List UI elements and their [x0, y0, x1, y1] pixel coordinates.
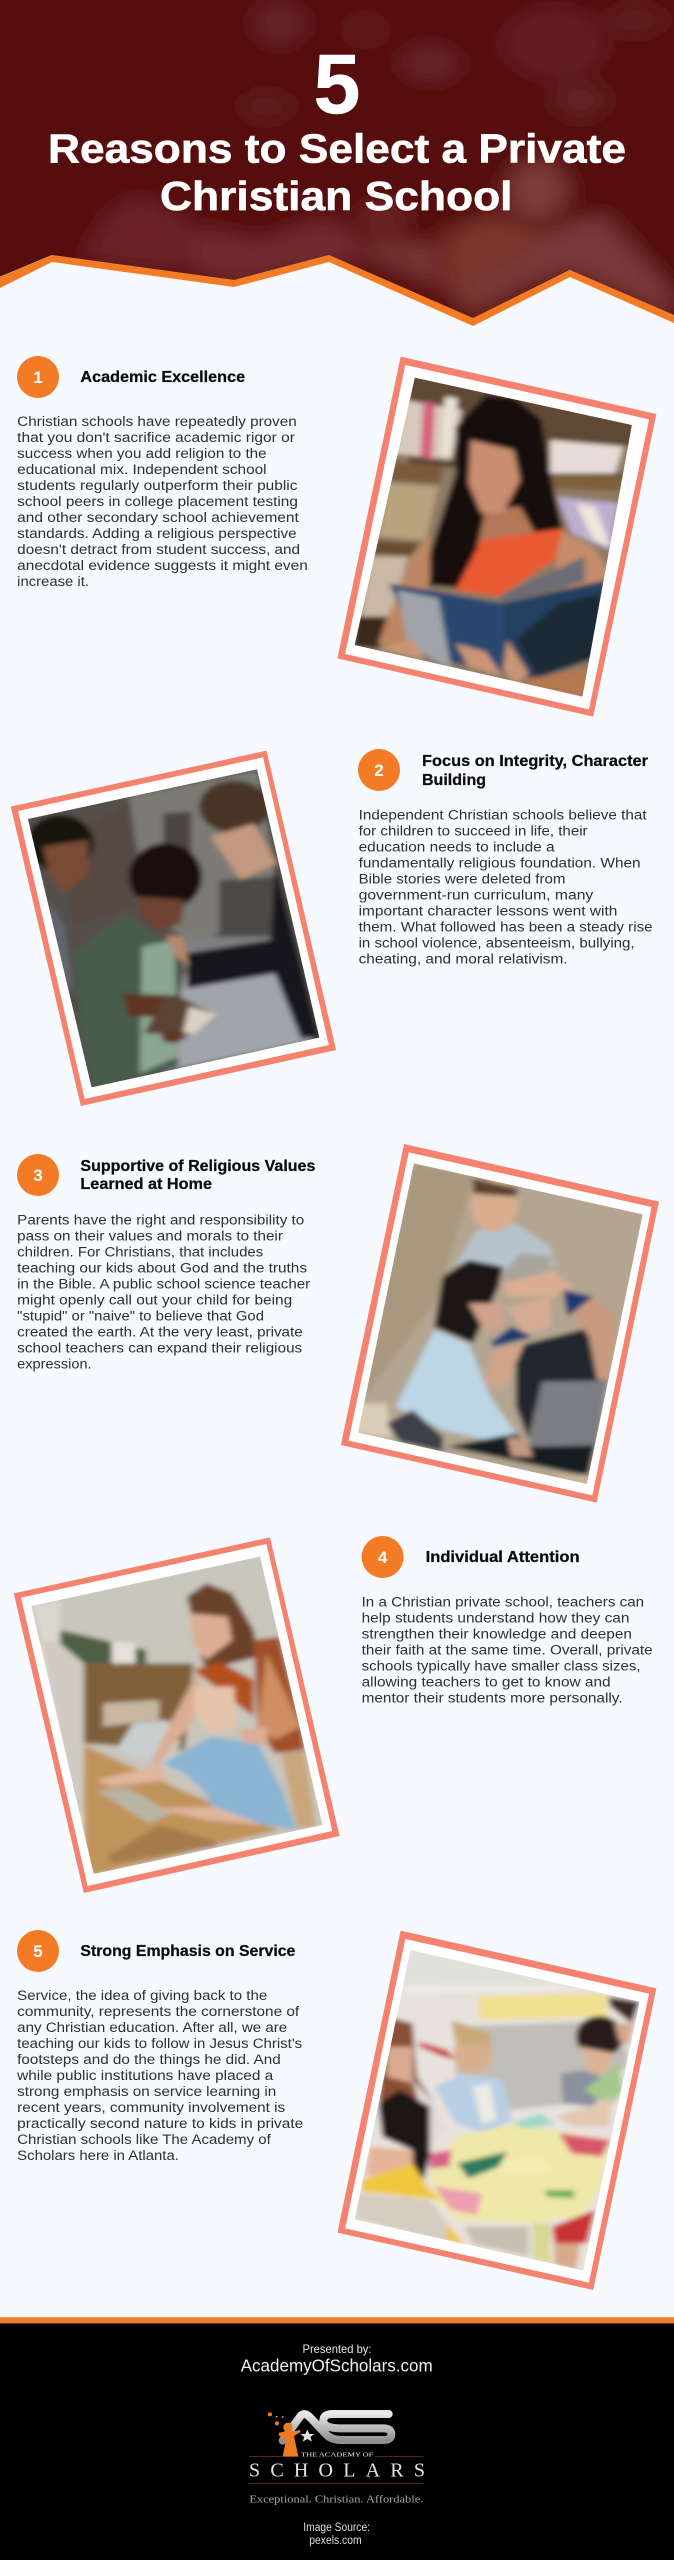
- photo 3: family hugging around a laptop: [340, 1144, 666, 1503]
- heading 5: Strong Emphasis on Service: [80, 1943, 296, 1960]
- number badge 2: 2: [374, 761, 384, 780]
- image source credit: pexels.com: [309, 2535, 362, 2547]
- heading 2: [422, 753, 648, 789]
- body text 2: [359, 807, 653, 966]
- body text 3: [17, 1212, 311, 1371]
- image source credit: Image Source:: [303, 2522, 370, 2534]
- number badge 1: 1: [33, 368, 43, 387]
- reason 5: [16, 1930, 662, 2290]
- body text 1: that you don't sacrifice academic rigor or: [17, 430, 295, 445]
- logo rules: [249, 2456, 423, 2483]
- body text 3: in the Bible. A public school science teacher: [17, 1276, 311, 1291]
- presented by text: AcademyOfScholars.com: [241, 2356, 433, 2376]
- body text 1: doesn't detract from student success, and: [17, 542, 300, 557]
- photo 5: children doing crafts at a table: [335, 1931, 662, 2290]
- body text 4: their faith at the same time. Overall, private: [362, 1643, 653, 1658]
- logo wordmark: Exceptional. Christian. Affordable.: [249, 2495, 423, 2506]
- body text 5: any Christian education. After all, we are: [17, 2020, 287, 2035]
- image source credit: [303, 2522, 370, 2547]
- photo 2: adults and boy with a bible: [9, 751, 344, 1107]
- body text 3: Parents have the right and responsibility to: [17, 1212, 304, 1227]
- icon: child silhouette and stars: [268, 2412, 314, 2457]
- body text 5: community, represents the cornerstone of: [17, 2004, 299, 2019]
- reason 4: [13, 1536, 653, 1893]
- body text 2: Independent Christian schools believe that: [359, 807, 647, 822]
- body text 5: footsteps and do the things he did. And: [17, 2052, 281, 2067]
- body text 1: students regularly outperform their public: [17, 478, 298, 493]
- photo 1: student reading a book: [335, 357, 662, 717]
- heading 3: [80, 1158, 315, 1193]
- photo 4: mother helping boy at a computer: [13, 1537, 344, 1893]
- body text 5: Scholars here in Atlanta.: [17, 2148, 179, 2163]
- presented by text: Presented by:: [302, 2342, 372, 2356]
- body text 2: fundamentally religious foundation. When: [359, 855, 641, 870]
- body text 3: school teachers can expand their religious: [17, 1340, 302, 1355]
- body text 1: Christian schools have repeatedly proven: [17, 414, 297, 429]
- number badge 3: 3: [33, 1166, 43, 1185]
- body text 1: anecdotal evidence suggests it might even: [17, 558, 308, 573]
- body text 3: expression.: [17, 1356, 92, 1371]
- body text 4: strengthen their knowledge and deepen: [362, 1627, 632, 1642]
- number badge 5: 5: [33, 1942, 43, 1961]
- body text 5: teaching our kids to follow in Jesus Christ's: [17, 2036, 302, 2051]
- body text 1: standards. Adding a religious perspective: [17, 526, 297, 541]
- reason 2: [9, 749, 653, 1107]
- body text 1: and other secondary school achievement: [17, 510, 299, 525]
- body text 5: practically second nature to kids in private: [17, 2116, 303, 2131]
- presented by text: [241, 2342, 433, 2376]
- body text 3: pass on their values and morals to their: [17, 1228, 283, 1243]
- body text 1: educational mix. Independent school: [17, 462, 267, 477]
- title: 5: [314, 37, 360, 131]
- number badge 4: 4: [378, 1548, 388, 1567]
- heading 3: Supportive of Religious Values: [80, 1158, 315, 1175]
- body text 1: success when you add religion to the: [17, 446, 267, 461]
- body text 1: increase it.: [17, 574, 89, 589]
- body text 4: [362, 1595, 653, 1706]
- heading 2: Building: [422, 772, 486, 789]
- heading 2: Focus on Integrity, Character: [422, 753, 648, 770]
- body text 4: mentor their students more personally.: [362, 1691, 623, 1706]
- body text 1: school peers in college placement testing: [17, 494, 298, 509]
- number badge 4: [362, 1536, 404, 1578]
- title: Reasons to Select a Private: [48, 126, 626, 172]
- body text 1: [17, 414, 308, 589]
- title: [48, 37, 626, 219]
- header zigzag orange edge: [0, 255, 674, 326]
- body text 5: Christian schools like The Academy of: [17, 2132, 271, 2147]
- body text 3: teaching our kids about God and the truths: [17, 1260, 307, 1275]
- body text 2: important character lessons went with: [359, 903, 617, 918]
- header banner with tinted photo: [0, 0, 674, 318]
- body text 2: them. What followed has been a steady rise: [359, 919, 653, 934]
- logo wordmark: SCHOLARS: [249, 2460, 425, 2482]
- body text 2: cheating, and moral relativism.: [359, 951, 568, 966]
- body text 3: created the earth. At the very least, private: [17, 1324, 303, 1339]
- number badge 5: [17, 1930, 59, 1972]
- body text 4: In a Christian private school, teachers can: [362, 1595, 644, 1610]
- body text 5: recent years, community involvement is: [17, 2100, 285, 2115]
- number badge 2: [358, 749, 400, 791]
- body text 2: for children to succeed in life, their: [359, 823, 588, 838]
- footer band: [0, 2317, 674, 2560]
- body text 3: children. For Christians, that includes: [17, 1244, 263, 1259]
- body text 5: strong emphasis on service learning in: [17, 2084, 276, 2099]
- body text 4: allowing teachers to get to know and: [362, 1675, 611, 1690]
- icon: AS monogram: [283, 2414, 391, 2441]
- logo wordmark: [249, 2452, 425, 2506]
- heading 3: Learned at Home: [80, 1176, 212, 1193]
- body text 5: [16, 1988, 303, 2163]
- heading 1: Academic Excellence: [80, 369, 245, 386]
- body text 2: Bible stories were deleted from: [359, 871, 565, 886]
- reason 1: [17, 356, 662, 717]
- body text 2: government-run curriculum, many: [359, 887, 594, 902]
- body text 3: "stupid" or "naive" to believe that God: [17, 1308, 264, 1323]
- title: Christian School: [160, 173, 512, 219]
- number badge 3: [17, 1154, 59, 1196]
- body text 3: might openly call out your child for being: [17, 1292, 292, 1307]
- logo wordmark: THE ACADEMY OF: [301, 2452, 374, 2459]
- heading 4: Individual Attention: [426, 1549, 580, 1566]
- body text 5: Service, the idea of giving back to the: [17, 1988, 267, 2003]
- body text 5: while public institutions have placed a: [16, 2068, 274, 2083]
- body text 4: help students understand how they can: [362, 1611, 629, 1626]
- logo: The Academy of Scholars: [249, 2412, 425, 2506]
- body text 4: schools typically have smaller class sizes,: [362, 1659, 641, 1674]
- number badge 1: [17, 356, 59, 398]
- body text 2: in school violence, absenteeism, bullying,: [359, 935, 635, 950]
- reason 3: [17, 1144, 666, 1503]
- body text 2: education needs to include a: [359, 839, 555, 854]
